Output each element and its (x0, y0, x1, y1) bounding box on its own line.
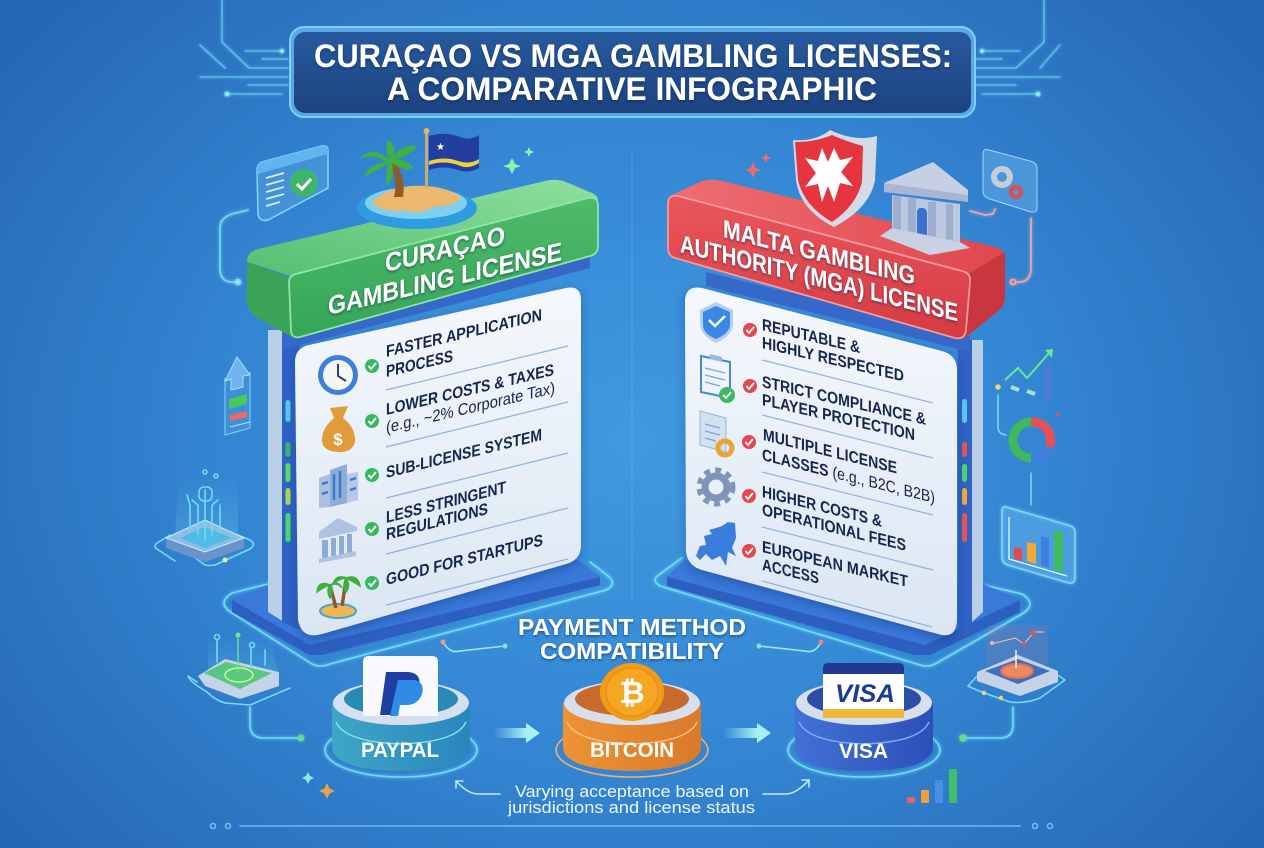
banner text: MALTA GAMBLING (723, 215, 915, 291)
icon: sparkles green (503, 147, 534, 174)
icon: PayPal card (363, 656, 438, 716)
payment: Bitcoin: BITCOIN (590, 739, 674, 762)
item: lower costs: (e.g., ~2% Corporate Tax) (386, 378, 555, 437)
arrows around caption (456, 780, 809, 794)
item: higher costs (699, 470, 906, 555)
item: lower costs (322, 360, 555, 452)
icon: bank (319, 518, 357, 563)
panel: MGA license (685, 272, 983, 635)
item: european access: ACCESS (762, 555, 819, 588)
item: less stringent: REGULATIONS (386, 499, 488, 544)
chart: bar panel (1002, 507, 1075, 583)
caption: Varying acceptance based on (515, 782, 749, 801)
icon: money bag: $ (333, 430, 343, 449)
payment: Bitcoin (556, 663, 708, 777)
heading: payment method compatibility (518, 614, 746, 664)
item: european access: EUROPEAN MARKET (762, 537, 909, 591)
mini bar chart (907, 769, 957, 803)
platform: right (655, 558, 1030, 666)
title banner (290, 27, 975, 117)
icon: orange chip (968, 625, 1065, 702)
item: european access (696, 522, 909, 591)
icon: documents with gear (700, 411, 732, 455)
icon: Europe map (696, 522, 736, 566)
item: strict compliance (701, 354, 926, 444)
item: good for startups: GOOD FOR STARTUPS (386, 531, 543, 589)
payment: Visa (788, 663, 940, 777)
icon: gears panel (983, 150, 1037, 212)
item: multiple classes: MULTIPLE LICENSE (763, 425, 897, 477)
spine (268, 330, 300, 630)
connector: left lower (250, 707, 304, 740)
connectors near heading (440, 640, 824, 652)
spine (958, 340, 983, 635)
icon: building (319, 464, 358, 508)
panel: Curaçao license (268, 250, 590, 635)
dividers (762, 360, 933, 627)
title text (314, 38, 952, 107)
item: strict compliance: STRICT COMPLIANCE & (762, 372, 926, 429)
circuit lines: top right (975, 0, 1060, 96)
item: reputable (700, 302, 904, 386)
footer line (210, 824, 1052, 828)
payment: PayPal: PAYPAL (361, 739, 439, 762)
icon: green chip (188, 632, 290, 705)
item: sub-license (319, 425, 542, 508)
title text: CURAÇAO VS MGA GAMBLING LICENSES: (314, 38, 952, 74)
icon: clipboard (701, 354, 735, 403)
platform: left (224, 560, 613, 666)
circuit lines: top left (200, 0, 288, 96)
banner text: AUTHORITY (MGA) LICENSE (680, 230, 958, 327)
banner text (680, 215, 958, 327)
icon: blue shield (700, 302, 733, 343)
arrow: Bitcoin to Visa (723, 723, 771, 743)
item: lower costs: LOWER COSTS & TAXES (386, 360, 554, 419)
item: faster application: FASTER APPLICATION (386, 305, 542, 361)
icon: red sparkles (745, 153, 771, 178)
item: higher costs: OPERATIONAL FEES (762, 500, 906, 555)
item: higher costs: HIGHER COSTS & (762, 482, 882, 531)
caption: jurisdictions and license status (507, 798, 755, 817)
item: multiple classes (700, 411, 935, 507)
icon: growth chart (995, 349, 1053, 435)
banner: MGA (668, 180, 1005, 338)
caption (507, 782, 755, 817)
connector: right lower (960, 707, 1013, 741)
item: faster application (318, 305, 542, 395)
heading: payment method compatibility: COMPATIBILITY (540, 638, 724, 664)
banner text: GAMBLING LICENSE (328, 236, 562, 321)
connector: right upper (970, 209, 1031, 284)
item: reputable: REPUTABLE & (762, 315, 860, 357)
icon: checklist window (257, 146, 328, 220)
icon: island with palm and flag (357, 128, 479, 229)
item: reputable: HIGHLY RESPECTED (762, 333, 904, 386)
title text: A COMPARATIVE INFOGRAPHIC (387, 71, 877, 107)
banner text: CURAÇAO (385, 220, 505, 278)
icon: money bag (322, 406, 355, 452)
icon: Visa card: VISA (835, 680, 895, 708)
item: faster application: PROCESS (386, 346, 453, 381)
sparkles bottom left (302, 772, 335, 799)
item: good for startups (317, 531, 543, 618)
icon: palm island (317, 577, 360, 618)
chart: donut (1013, 412, 1061, 505)
icon: chip hologram (155, 470, 254, 566)
banner: Curaçao (247, 180, 598, 337)
card (685, 288, 957, 635)
payment: PayPal (325, 656, 477, 777)
icon: temple (880, 162, 970, 255)
icon: Bitcoin coin (600, 663, 664, 721)
icon: arrow document (225, 357, 250, 435)
icon: Visa card (823, 663, 904, 718)
item: less stringent (319, 477, 507, 563)
card (295, 288, 581, 635)
item: less stringent: LESS STRINGENT (386, 477, 507, 527)
arrow: PayPal to Bitcoin (494, 723, 540, 743)
icon: clock (318, 355, 358, 395)
item: multiple classes: CLASSES (e.g., B2C, B2B) (762, 445, 935, 507)
heading: payment method compatibility: PAYMENT METHOD (518, 614, 746, 640)
item: sub-license: SUB-LICENSE SYSTEM (386, 425, 542, 482)
icon: Bitcoin coin: ₿ (619, 675, 645, 710)
icon: island with palm and flag: ★ (436, 142, 445, 153)
dividers (386, 346, 568, 605)
icon: Maltese shield (793, 130, 877, 227)
icon: gear (699, 470, 733, 504)
payment: Visa: VISA (839, 740, 888, 763)
connector: left upper (220, 210, 248, 284)
item: strict compliance: PLAYER PROTECTION (762, 390, 915, 444)
